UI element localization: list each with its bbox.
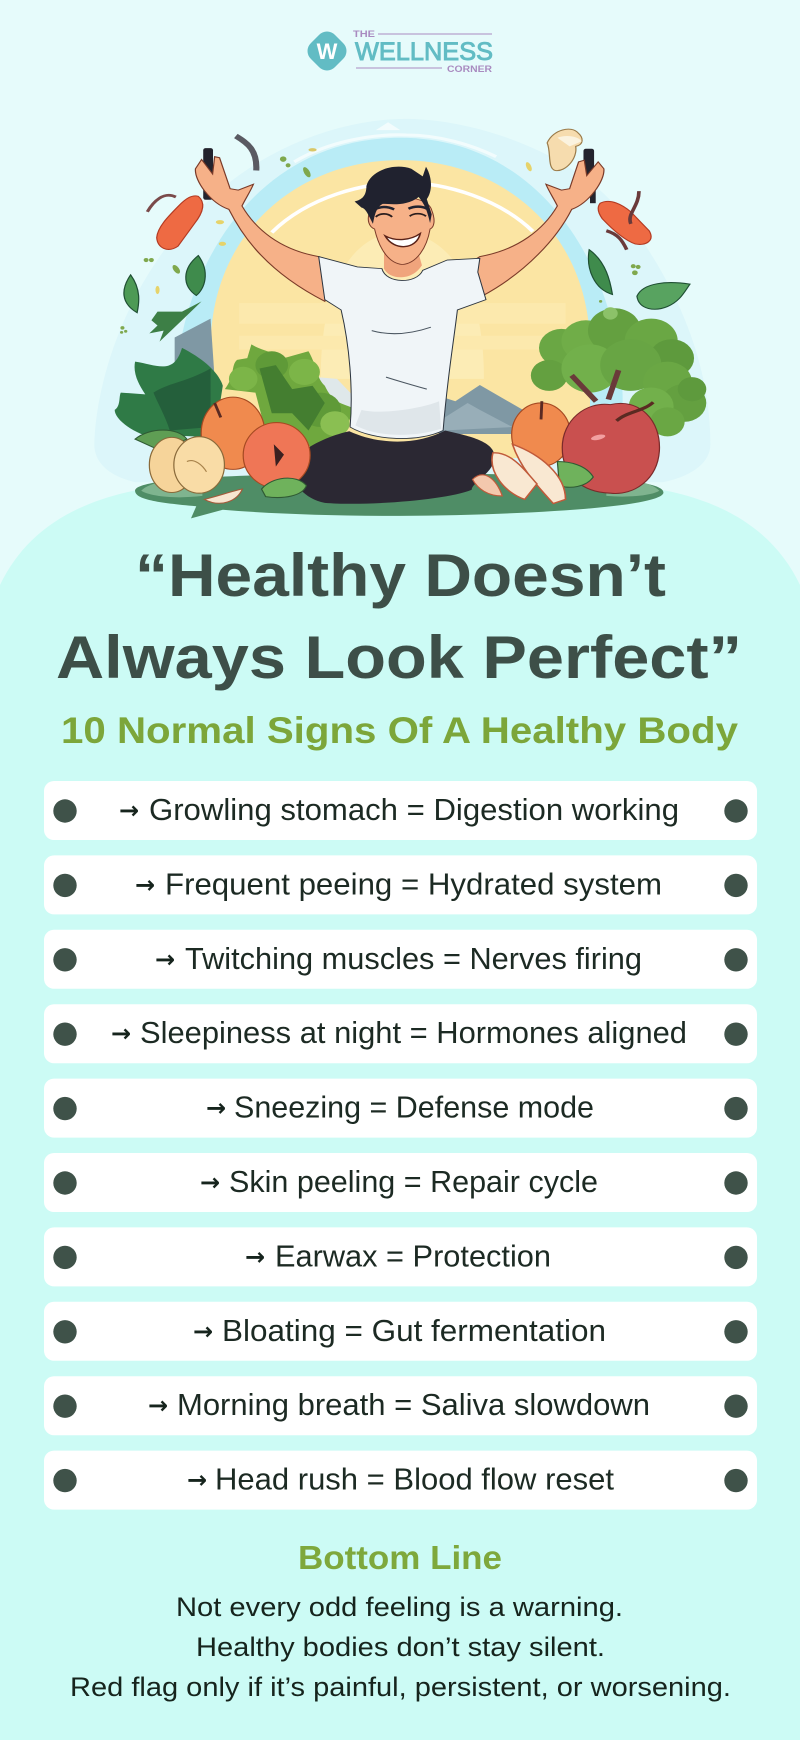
sign 10: → — [187, 1466, 207, 1494]
sign 8: → — [193, 1317, 213, 1345]
eyes — [376, 214, 426, 217]
logo badge — [303, 27, 351, 75]
hair — [355, 167, 432, 224]
neck — [384, 246, 422, 277]
ground — [135, 474, 663, 518]
left arm and hand — [195, 157, 333, 301]
sign 5: Sneezing = Defense mode — [234, 1091, 594, 1125]
sign 10 — [44, 1451, 757, 1510]
sign 7: → — [245, 1243, 265, 1271]
sign 5: → — [206, 1094, 226, 1122]
sign 9 — [44, 1376, 757, 1435]
face — [368, 197, 434, 264]
floating mushroom slices — [547, 129, 582, 171]
subtitle: 10 Normal Signs Of A Healthy Body — [61, 710, 738, 751]
smile — [385, 234, 420, 247]
eyebrows — [375, 207, 427, 209]
sign 1: → — [119, 796, 139, 824]
bottom line text: Healthy bodies don’t stay silent. — [196, 1632, 605, 1662]
sign 8: Bloating = Gut fermentation — [222, 1314, 606, 1348]
sign 2: → — [135, 871, 155, 899]
floating leaves — [124, 250, 690, 342]
sign 3: Twitching muscles = Nerves firing — [185, 942, 642, 976]
bottom line text: Not every odd feeling is a warning. — [176, 1592, 623, 1622]
logo wordmark: THE — [353, 29, 375, 39]
title: “Healthy Doesn’t — [135, 542, 666, 609]
lettuce, left — [225, 344, 353, 448]
sign 6 — [44, 1153, 757, 1212]
white t-shirt — [319, 257, 486, 439]
sign 7: Earwax = Protection — [275, 1239, 551, 1273]
logo wordmark: CORNER — [447, 64, 493, 74]
sky arches — [94, 119, 710, 482]
sign 9: → — [148, 1392, 168, 1420]
right leafy tree — [531, 307, 706, 436]
sign 5 — [44, 1079, 757, 1138]
right carrot and twig — [583, 149, 651, 250]
peach halves — [135, 430, 224, 493]
logo wordmark — [353, 29, 493, 74]
bottom line heading: Bottom Line — [298, 1539, 502, 1576]
logo badge: W — [317, 39, 338, 64]
sign 1: Growling stomach = Digestion working — [149, 793, 679, 827]
sign 7 — [44, 1227, 757, 1286]
sign 2: Frequent peeing = Hydrated system — [165, 867, 662, 901]
logo wordmark: WELLNESS — [355, 38, 493, 66]
sign 8 — [44, 1302, 757, 1361]
black trousers — [288, 431, 495, 504]
sun — [211, 160, 590, 458]
dark green leaves, left — [115, 348, 223, 437]
confetti dots — [120, 148, 641, 334]
hero illustration — [94, 119, 710, 518]
sign 4: Sleepiness at night = Hormones aligned — [140, 1016, 687, 1050]
cut tomato — [243, 423, 310, 488]
sign 1 — [44, 781, 757, 840]
sign 2 — [44, 855, 757, 914]
red apple — [562, 402, 659, 493]
title — [56, 542, 742, 691]
sign 9: Morning breath = Saliva slowdown — [177, 1388, 650, 1422]
lower panel — [0, 483, 800, 1740]
small leaf and slice, bottom left — [204, 478, 306, 503]
shirt shade — [355, 401, 441, 435]
mountains — [175, 319, 529, 434]
man — [195, 157, 604, 504]
apple slices and leaf, right — [472, 444, 593, 504]
title: Always Look Perfect” — [56, 624, 742, 691]
sign 4: → — [111, 1020, 131, 1048]
bottom line text: Red flag only if it’s painful, persistent, or worsening. — [70, 1672, 731, 1702]
orange apple, left — [201, 397, 265, 469]
sign 4 — [44, 1004, 757, 1063]
left carrot and twig — [147, 136, 256, 249]
sign 6: → — [200, 1168, 220, 1196]
sign 3 — [44, 930, 757, 989]
sign 6: Skin peeling = Repair cycle — [229, 1165, 598, 1199]
foliage — [531, 307, 706, 436]
sign 3: → — [155, 945, 175, 973]
orange apple, right — [512, 401, 570, 466]
sign 10: Head rush = Blood flow reset — [215, 1463, 615, 1497]
right arm and hand — [472, 160, 604, 296]
logo — [303, 27, 493, 75]
shirt folds — [372, 327, 431, 389]
list of signs — [44, 781, 757, 1510]
bottom line text — [70, 1592, 731, 1702]
